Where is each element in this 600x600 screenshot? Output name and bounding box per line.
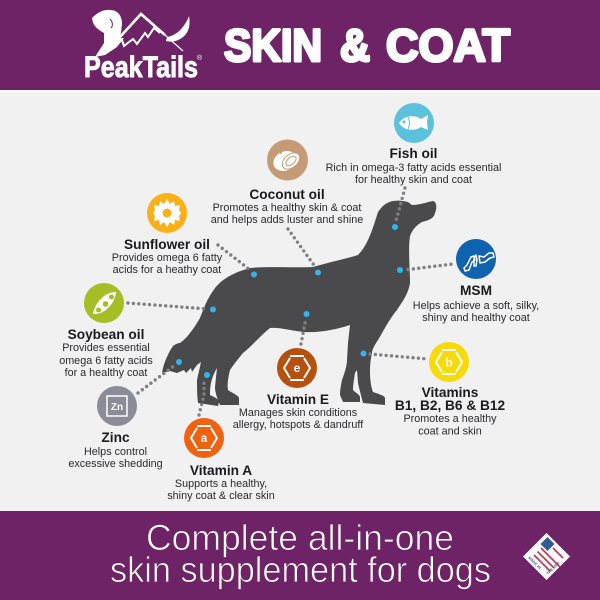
- text: soybean oil: for a healthy coat: [65, 367, 147, 379]
- text: fish oil: [326, 146, 501, 186]
- title: COAT: [386, 20, 510, 71]
- icon: vitamin A: [184, 418, 224, 458]
- marker: fish oil: [392, 188, 405, 230]
- text: vitamin A: shiny coat & clear skin: [167, 490, 275, 502]
- icon: vitamin B: b: [445, 356, 453, 370]
- logo: PeakTails: PeakTails: [84, 51, 198, 84]
- text: vitamins B: Vitamins: [422, 385, 479, 400]
- marker: sunflower oil: [218, 245, 257, 278]
- text: coconut oil: Coconut oil: [249, 187, 325, 202]
- icon: soybean: [84, 283, 124, 323]
- text: coconut oil: [211, 187, 363, 226]
- text: MSM: [413, 283, 539, 324]
- text: soybean oil: Soybean oil: [68, 327, 144, 342]
- title: SKIN: [224, 20, 322, 71]
- text: sunflower oil: [112, 237, 223, 276]
- text: sunflower oil: Provides omega 6 fatty: [112, 252, 223, 264]
- logo: PeakTails: [84, 10, 203, 84]
- text: soybean oil: omega 6 fatty acids: [59, 355, 153, 367]
- text: sunflower oil: Sunflower oil: [124, 237, 210, 252]
- footer text: skin supplement for dogs: [110, 549, 491, 590]
- marker: vitamin E: [301, 311, 310, 344]
- text: vitamin A: [167, 463, 275, 502]
- text: fish oil: Rich in omega-3 fatty acids essential: [326, 162, 501, 174]
- header band: [0, 0, 600, 92]
- text: vitamins B: coat and skin: [418, 426, 482, 438]
- dog silhouette: [162, 201, 436, 406]
- marker: vitamin A: [199, 372, 210, 415]
- icon: vitamin E: [277, 348, 317, 388]
- text: vitamin E: allergy, hotspots & dandruff: [233, 419, 364, 431]
- text: MSM: MSM: [460, 283, 492, 298]
- text: soybean oil: [59, 327, 153, 379]
- text: soybean oil: Provides essential: [62, 342, 150, 354]
- icon: zinc: [97, 386, 137, 426]
- title: &: [340, 20, 370, 71]
- icon: sunflower: [147, 193, 187, 233]
- text: vitamins B: [395, 385, 506, 438]
- text: zinc: Zinc: [101, 430, 130, 445]
- footer text: Complete all-in-one: [146, 517, 454, 558]
- text: zinc: excessive shedding: [68, 458, 163, 470]
- text: fish oil: Fish oil: [390, 146, 437, 161]
- text: fish oil: for healthy skin and coat: [355, 174, 472, 186]
- marker: soybean oil: [128, 303, 216, 312]
- marker: MSM: [397, 264, 453, 273]
- icon: vitamin B: [429, 342, 469, 382]
- text: vitamin E: Manages skin conditions: [239, 407, 358, 419]
- badge: made in the USA: THE USA: [546, 561, 561, 576]
- text: vitamin E: Vitamin E: [267, 392, 329, 407]
- text: coconut oil: and helps adds luster and shine: [211, 214, 363, 226]
- text: vitamins B: B1, B2, B6 & B12: [395, 398, 506, 413]
- text: zinc: [68, 430, 163, 470]
- marker: coconut oil: [288, 229, 321, 276]
- text: coconut oil: Promotes a healthy skin & coat: [213, 202, 361, 214]
- title: [224, 20, 510, 71]
- marker: zinc: [138, 359, 182, 393]
- text: zinc: Helps control: [84, 446, 147, 458]
- text: vitamin E: [233, 392, 364, 431]
- badge: made in the USA: MADE IN: [527, 556, 542, 570]
- text: MSM: shiny and healthy coat: [422, 312, 530, 324]
- marker: vitamins B: [360, 350, 428, 359]
- icon: zinc: Zn: [111, 402, 123, 413]
- text: MSM: Helps achieve a soft, silky,: [413, 300, 539, 312]
- text: sunflower oil: acids for a heathy coat: [113, 264, 221, 276]
- icon: coconut: [267, 140, 308, 180]
- footer band: [0, 511, 600, 600]
- icon: MSM joint: [456, 239, 496, 279]
- footer text: [110, 517, 491, 590]
- text: vitamins B: Promotes a healthy: [403, 413, 497, 425]
- badge: made in the USA: [523, 533, 570, 580]
- logo: PeakTails: ®: [197, 54, 203, 62]
- icon: fish: [394, 103, 434, 143]
- icon: vitamin A: a: [201, 431, 208, 445]
- text: vitamin A: Supports a healthy,: [175, 478, 267, 490]
- icon: vitamin E: e: [294, 361, 301, 375]
- text: vitamin A: Vitamin A: [190, 463, 252, 478]
